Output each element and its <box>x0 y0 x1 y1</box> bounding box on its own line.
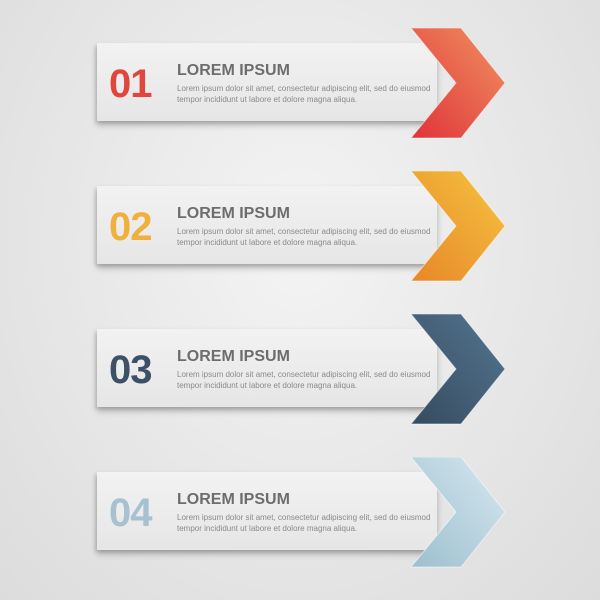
chevron 03 <box>410 314 506 424</box>
heading 01: LOREM IPSUM <box>177 62 290 79</box>
number 04: 04 <box>109 491 152 535</box>
item 04 <box>93 457 506 568</box>
heading 03: LOREM IPSUM <box>177 348 290 365</box>
heading 04: LOREM IPSUM <box>177 491 290 508</box>
chevron 04 <box>410 457 506 568</box>
chevron 02 <box>410 171 506 282</box>
item 02 <box>93 171 506 282</box>
item 01 <box>93 28 506 138</box>
chevron 01 <box>410 28 506 138</box>
item 03 <box>93 314 506 424</box>
text 04: Lorem ipsum dolor sit amet, consectetur adipiscing elit, sed do eiusmod tempor incididunt ut labore et dolore magna aliqua. <box>177 513 430 533</box>
banner 02 <box>97 186 437 264</box>
number 02: 02 <box>109 205 152 249</box>
banner 03 <box>97 329 437 407</box>
heading 02: LOREM IPSUM <box>177 205 290 222</box>
number 01: 01 <box>109 62 152 106</box>
text 02: Lorem ipsum dolor sit amet, consectetur adipiscing elit, sed do eiusmod tempor incididunt ut labore et dolore magna aliqua. <box>177 227 430 247</box>
text 03: Lorem ipsum dolor sit amet, consectetur adipiscing elit, sed do eiusmod tempor incididunt ut labore et dolore magna aliqua. <box>177 370 430 390</box>
banner 04 <box>97 472 437 550</box>
number 03: 03 <box>109 348 152 392</box>
text 01: Lorem ipsum dolor sit amet, consectetur adipiscing elit, sed do eiusmod tempor incididunt ut labore et dolore magna aliqua. <box>177 84 430 104</box>
banner 01 <box>97 43 437 121</box>
